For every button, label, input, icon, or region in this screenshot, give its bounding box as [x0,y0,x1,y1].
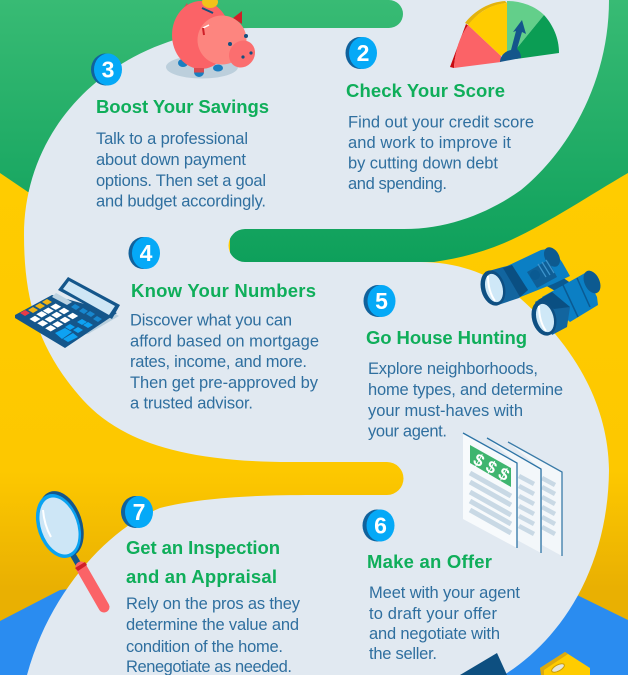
heading: get an inspection and an appraisal [126,537,280,587]
text: boost your savings: and budget accordingly. [96,192,266,210]
badge 3: 3 [102,56,114,82]
badge 7 [121,496,153,528]
badge 7: 7 [133,499,145,525]
background: blue band [0,560,628,675]
text: boost your savings: about down payment [96,151,246,169]
text: know your numbers: rates, income, and more. [130,353,307,371]
text: go house hunting: home types, and determine [368,381,563,399]
badge 5: 5 [375,288,388,314]
text: go house hunting [368,360,563,440]
icon: piggy bank [166,0,260,78]
text: go house hunting: your agent. [368,422,447,440]
document middle [487,438,541,553]
badge 2: 2 [357,40,369,66]
background: green band [0,0,628,262]
icon: magnifying glass [28,485,104,607]
text: know your numbers: Discover what you can [130,312,292,330]
text: boost your savings: options. Then set a goal [96,172,266,190]
heading: go house hunting: Go House Hunting [366,327,527,348]
heading: make an offer: Make an Offer [367,551,492,572]
text: check your score: by cutting down debt [348,154,498,172]
heading: boost your savings: Boost Your Savings [96,96,269,117]
badge 2 [346,37,377,69]
badge 6 [362,510,394,542]
right barrel [528,268,604,338]
text: check your score [348,114,534,193]
text: check your score: Find out your credit score [348,114,534,132]
icon: yellow toolbox [540,652,590,675]
text: get an inspection: condition of the home. [126,638,283,656]
step 4 [128,237,319,412]
icon: calculator [15,277,120,348]
heading: get an inspection and an appraisal: Get an Inspection [126,537,280,558]
text: make an offer: Meet with your agent [369,584,520,602]
icon: offer documents [463,433,562,556]
step 5 [364,285,563,440]
text: go house hunting: your must-haves with [368,402,523,420]
badge 3 [91,54,122,86]
text: check your score: and spending. [348,175,447,193]
text: make an offer: the seller. [369,645,437,663]
left barrel [477,244,572,308]
step 7 [121,496,301,675]
text: know your numbers: Then get pre-approved by [130,374,319,392]
text: boost your savings: Talk to a professional [96,130,248,148]
badge 4 [128,237,160,269]
text: get an inspection [126,595,301,675]
document back [508,442,562,556]
text: know your numbers: afford based on mortgage [130,332,319,350]
text: go house hunting: Explore neighborhoods, [368,360,538,378]
step 3 [91,54,269,210]
heading: get an inspection and an appraisal: and an Appraisal [126,566,277,587]
heading: check your score: Check Your Score [346,80,505,101]
text: make an offer: and negotiate with [369,625,500,643]
focus bridge [527,260,557,288]
text: make an offer [369,584,520,663]
badge 4: 4 [140,240,153,266]
text: boost your savings [96,130,266,210]
text: know your numbers [130,312,319,412]
badge 6: 6 [374,512,387,538]
background: yellow band [0,165,628,635]
heading: know your numbers: Know Your Numbers [131,280,316,301]
text: get an inspection: determine the value and [126,616,299,634]
text: check your score: and work to improve it [348,134,511,152]
document front: $$$ [470,450,513,485]
icon: credit score gauge [450,1,559,68]
text: get an inspection: Rely on the pros as they [126,595,301,613]
icon: binoculars [477,244,604,338]
text: know your numbers: a trusted advisor. [130,394,253,412]
step 6 [362,510,520,663]
icon: dark house roof [460,653,507,675]
step 2 [346,37,534,193]
badge 5 [364,285,396,317]
text: make an offer: to draft your offer [369,605,498,623]
